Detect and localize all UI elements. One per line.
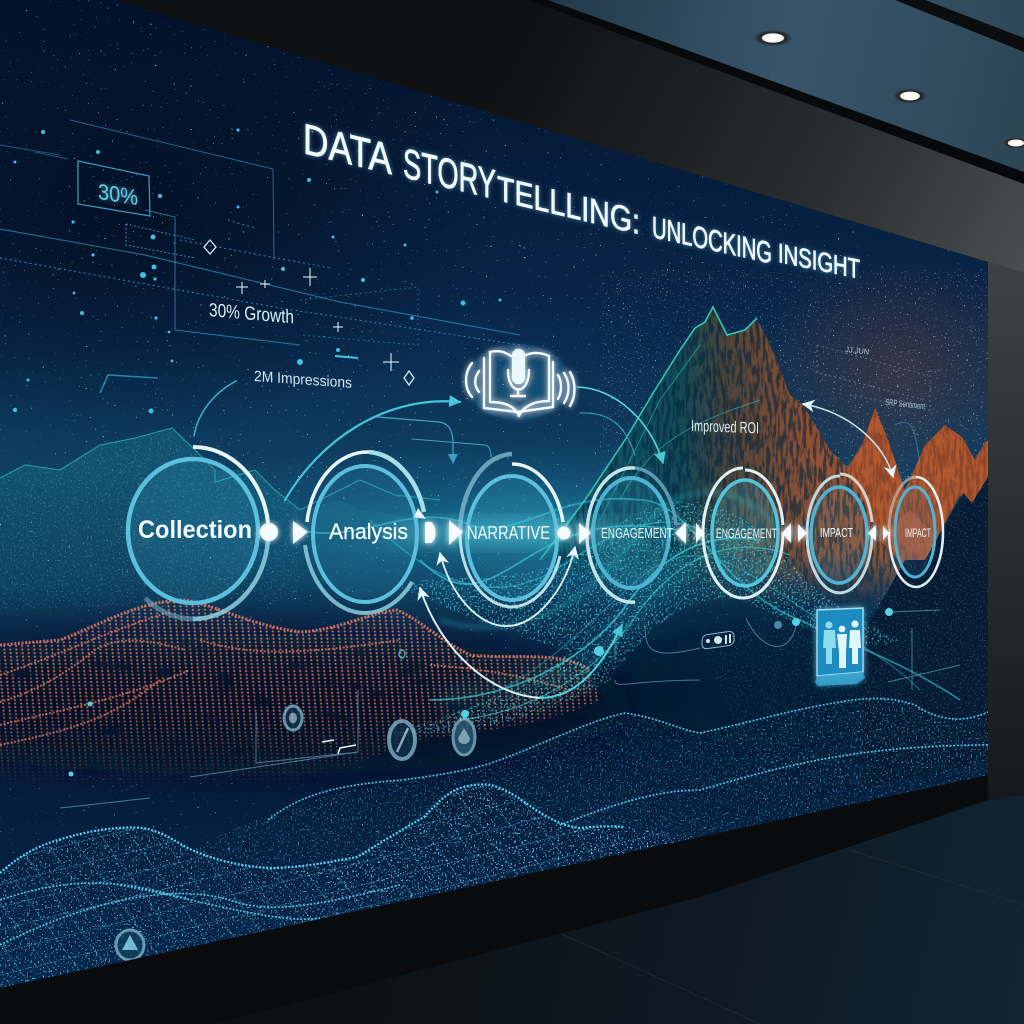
arrows above and around the process ring xyxy=(194,381,920,500)
callout: 30% Growth: 30% Growth xyxy=(209,300,294,328)
small illegible data captions at top right xyxy=(845,345,926,411)
callout: 30% box label: 30% xyxy=(98,179,138,210)
terrain: blue dotted mesh hills xyxy=(0,699,988,988)
title: INSIGHT xyxy=(778,237,860,285)
teal node dots xyxy=(594,646,604,656)
arrow: white loop under narrative xyxy=(440,547,575,626)
process ring: Collection xyxy=(128,447,268,619)
line: branch to narrative xyxy=(412,439,491,457)
icon: teardrop pin badge xyxy=(453,719,475,755)
line: impact arc xyxy=(895,422,920,465)
teal particle cloud xyxy=(390,501,900,735)
UI bracket frames xyxy=(60,610,960,808)
process ring: Impact 2 xyxy=(889,477,943,587)
icon: ring badge lower left xyxy=(284,706,302,730)
process ring: Impact 1 xyxy=(807,474,872,593)
process ring: Collection: Collection xyxy=(138,516,252,544)
title: TELLLING: xyxy=(497,168,640,242)
arrow: book to engagement xyxy=(577,387,663,463)
process ring: Impact 2: IMPACT xyxy=(905,526,931,540)
arrow: collection rise to book icon xyxy=(285,401,460,500)
small illegible data captions at top right: SRP Sentiment xyxy=(885,397,926,411)
process ring: Narrative: NARRATIVE xyxy=(467,523,550,543)
connectors: flow nodes and triangles between rings xyxy=(260,520,889,545)
icon: sound waves right xyxy=(558,372,574,406)
flowing teal data streams xyxy=(300,492,960,720)
arrow: collection to impressions xyxy=(194,381,236,436)
process ring: Engagement 1: ENGAGEMENT xyxy=(601,525,673,542)
title: STORY xyxy=(403,140,496,209)
title: UNLOCKING xyxy=(652,211,772,271)
status chip xyxy=(702,631,734,649)
terrain: red dotted mesh xyxy=(0,600,600,800)
icon: bottom corner badge xyxy=(116,930,144,960)
process ring: Engagement 2: ENGAGEMENT xyxy=(716,525,777,541)
process ring: Narrative xyxy=(460,454,563,607)
icon: ring badge with glyph xyxy=(389,721,415,759)
terrain: dark foreground ridge on the right xyxy=(600,477,990,790)
arrow: down into narrative xyxy=(377,417,453,463)
chart frames, dashed guides and stars xyxy=(0,120,520,393)
line: secondary book link xyxy=(580,413,635,455)
title xyxy=(303,116,860,285)
black plinth below the screen xyxy=(0,775,988,1024)
callout: 2M Impressions: 2M Impressions xyxy=(254,368,352,392)
process ring: Engagement 1 xyxy=(587,468,676,602)
small illegible data captions at top right: JJ.JUN xyxy=(845,345,870,357)
sparkles xyxy=(236,268,399,371)
icon: sound waves left xyxy=(466,363,479,397)
title: DATA xyxy=(303,116,392,184)
arrow: large loop from analysis to engagement xyxy=(420,588,622,698)
process ring: Analysis: Analysis xyxy=(329,519,408,544)
process ring: Impact 1: IMPACT xyxy=(820,525,853,540)
darker band behind the red mesh xyxy=(0,635,640,775)
arrow: double-headed ROI link xyxy=(803,404,893,477)
process ring: Analysis xyxy=(305,452,426,613)
process ring: Engagement 2 xyxy=(703,468,783,598)
icon: ceiling spotlights xyxy=(754,30,1024,149)
small UI icons in the lower band xyxy=(116,650,475,960)
terrain: central mountain xyxy=(540,307,950,620)
icon: screen with three people xyxy=(815,608,865,686)
icon: small ring on red mesh xyxy=(399,650,405,658)
icon: open book with microphone xyxy=(466,344,574,420)
terrain: teal hills behind Collection xyxy=(0,428,470,620)
terrain: orange peaks on the right xyxy=(846,408,988,564)
callout: Improved ROI: Improved ROI xyxy=(691,418,759,437)
white tick marks xyxy=(322,740,356,754)
